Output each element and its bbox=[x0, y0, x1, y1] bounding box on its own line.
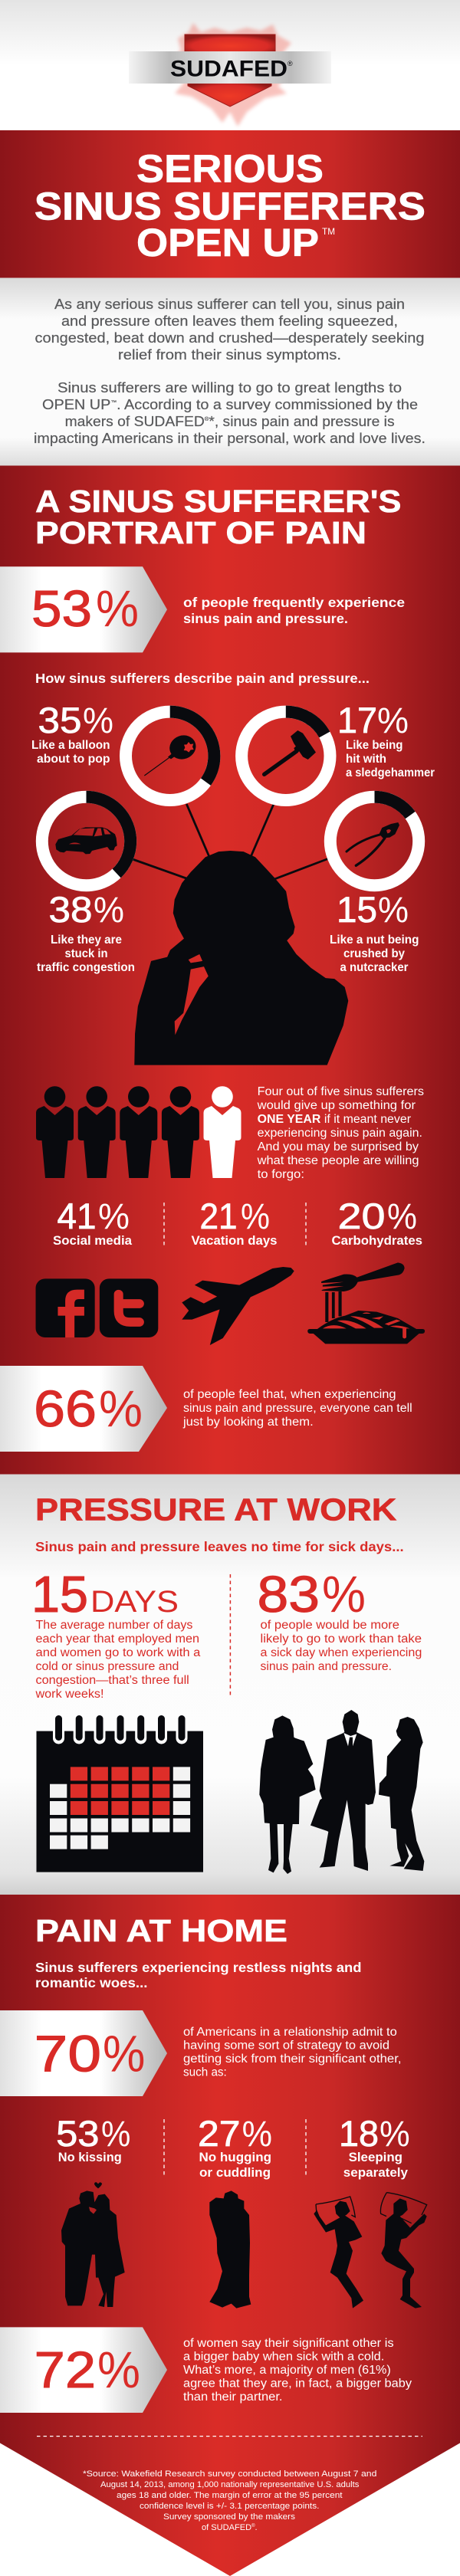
stat: 27% no hugging: or cuddling bbox=[199, 2165, 271, 2180]
callout: 70%: getting sick from their significant other, bbox=[183, 2053, 402, 2066]
callout: 70%: % bbox=[103, 2025, 145, 2083]
stat: 17% sledgehammer: 17 bbox=[337, 701, 377, 741]
stat: 15% nutcracker: crushed by bbox=[343, 947, 405, 960]
text block: intro: As any serious sinus sufferer can tell you, sinus pain bbox=[54, 297, 405, 312]
stat: 41% social media bbox=[53, 1196, 133, 1248]
stat: 83%: sinus pain and pressure. bbox=[261, 1660, 392, 1673]
stat: 18% sleeping separately: Sleeping bbox=[349, 2150, 402, 2164]
callout: 72% bbox=[0, 2327, 412, 2413]
heading: pain at home: PAIN AT HOME bbox=[35, 1913, 288, 1948]
callout: 70%: such as: bbox=[183, 2066, 227, 2079]
heading: a sinus sufferer's portrait of pain bbox=[35, 484, 402, 550]
panel: intro background bbox=[0, 277, 460, 466]
icon: business people bbox=[259, 1710, 424, 1874]
stat: 15 days: work weeks! bbox=[34, 1688, 104, 1701]
callout: 53%: sinus pain and pressure. bbox=[183, 611, 348, 626]
text block: source footnote: . bbox=[255, 2523, 258, 2532]
logo: Sudafed shield bbox=[129, 23, 331, 126]
callout: 66% bbox=[0, 1366, 412, 1452]
stat: 17% sledgehammer: Like being bbox=[346, 739, 403, 752]
stat: 27% no hugging: % bbox=[242, 2114, 272, 2154]
title: SERIOUS bbox=[136, 147, 324, 190]
callout: 53%: of people frequently experience bbox=[183, 595, 405, 610]
text block: intro: ® bbox=[205, 416, 209, 422]
stat: 41% social media: Social media bbox=[53, 1233, 133, 1248]
subheading: how sufferers describe pain: How sinus sufferers describe pain and pressure... bbox=[35, 671, 370, 686]
text block: intro: and pressure often leaves them feeling squeezed, bbox=[61, 313, 398, 329]
callout: 70%: of Americans in a relationship admit to bbox=[183, 2026, 397, 2039]
stat: 15 days: DAYS bbox=[90, 1585, 179, 1619]
stat: 18% sleeping separately: % bbox=[380, 2114, 410, 2154]
stat: 15 days bbox=[31, 1566, 201, 1701]
callout: 66%: sinus pain and pressure, everyone can tell bbox=[183, 1402, 412, 1415]
icon: balloon bbox=[144, 732, 199, 776]
text block: intro: . According to a survey commissioned by the bbox=[117, 397, 418, 412]
callout: 66%: % bbox=[99, 1380, 143, 1438]
callout: 72%: of women say their significant other is bbox=[183, 2337, 394, 2350]
text block: four out of five: what these people are willing bbox=[257, 1154, 419, 1167]
stat: 41% social media: 41 bbox=[57, 1196, 97, 1237]
callout: 72%: agree that they are, in fact, a bigger baby bbox=[183, 2377, 412, 2390]
stat: 15% nutcracker: 15 bbox=[337, 890, 377, 930]
stat: 53% no kissing: 53 bbox=[56, 2114, 100, 2154]
title: OPEN UP bbox=[136, 221, 319, 264]
callout: 70% bbox=[0, 2010, 402, 2096]
title: TM bbox=[322, 228, 335, 237]
stat: 15 days: 15 bbox=[31, 1566, 88, 1623]
stat: 83%: of people would be more bbox=[261, 1619, 399, 1632]
text block: intro: relief from their sinus symptoms. bbox=[118, 347, 341, 363]
callout: 53%: 53 bbox=[31, 580, 92, 638]
stat: 15% nutcracker: a nutcracker bbox=[340, 961, 408, 974]
stat: 17% sledgehammer: % bbox=[377, 701, 409, 741]
icon: kissing couple bbox=[61, 2182, 125, 2307]
text block: source footnote bbox=[83, 2469, 376, 2532]
stat: 38% traffic: 38 bbox=[49, 890, 92, 930]
stat: 27% no hugging bbox=[198, 2114, 272, 2180]
panel: title banner bbox=[0, 130, 460, 277]
callout: 70%: 70 bbox=[34, 2025, 101, 2083]
callout: 72%: What’s more, a majority of men (61%) bbox=[183, 2364, 391, 2377]
stat: 17% sledgehammer: hit with bbox=[346, 753, 386, 766]
stat: 21% vacation days: % bbox=[241, 1196, 270, 1237]
icon: car bbox=[55, 827, 117, 854]
stat: 17% sledgehammer: a sledgehammer bbox=[346, 766, 435, 779]
stat: 38% traffic bbox=[37, 797, 135, 974]
stat: 83%: 83 bbox=[258, 1566, 320, 1623]
stat: 27% no hugging: No hugging bbox=[199, 2150, 271, 2164]
stat: 15 days: and women go to work with a bbox=[35, 1646, 201, 1659]
text block: intro: *, sinus pain and pressure is bbox=[209, 414, 395, 429]
text block: intro bbox=[34, 297, 426, 446]
stat: 35% balloon bbox=[31, 701, 214, 800]
icon: hammer bbox=[264, 730, 316, 774]
stat: 15% nutcracker: Like a nut being bbox=[330, 934, 419, 947]
subheading: restless nights bbox=[35, 1960, 362, 1990]
stat: 53% no kissing: No kissing bbox=[58, 2150, 122, 2164]
icon: airplane bbox=[182, 1267, 294, 1345]
text block: source footnote: of SUDAFED bbox=[202, 2523, 251, 2532]
text block: intro: impacting Americans in their personal, work and love lives. bbox=[34, 431, 426, 446]
stat: 83%: likely to go to work than take bbox=[261, 1633, 422, 1646]
text block: four out of five: ONE YEAR if it meant never bbox=[258, 1113, 411, 1126]
stat: 17% sledgehammer bbox=[242, 701, 435, 800]
stat: 35% balloon: % bbox=[83, 701, 113, 741]
text block: four out of five: Four out of five sinus sufferers bbox=[258, 1085, 424, 1098]
logo: Sudafed shield: SUDAFED bbox=[170, 57, 288, 81]
heading: pressure at work: PRESSURE AT WORK bbox=[35, 1492, 397, 1528]
stat: 15 days: The average number of days bbox=[35, 1619, 193, 1632]
stat: 21% vacation days bbox=[192, 1196, 278, 1248]
callout: 72%: 72 bbox=[34, 2341, 96, 2399]
stat: 15 days: each year that employed men bbox=[35, 1633, 199, 1646]
stat: 20% carbohydrates: 20 bbox=[337, 1196, 385, 1237]
icon: nutcracker bbox=[347, 822, 399, 865]
stat: 20% carbohydrates: % bbox=[387, 1196, 417, 1237]
stat: 18% sleeping separately: 18 bbox=[339, 2114, 379, 2154]
callout: 66%: 66 bbox=[34, 1380, 97, 1438]
panel: pressure at work background bbox=[0, 1475, 460, 1895]
stat: 38% traffic: traffic congestion bbox=[37, 961, 135, 974]
text block: four out of five: experiencing sinus pain again. bbox=[258, 1127, 422, 1140]
callout: 72%: a bigger baby when sick with a cold. bbox=[183, 2350, 384, 2364]
heading: a sinus sufferer's portrait of pain: A SINUS SUFFERER'S bbox=[35, 484, 402, 519]
panel: header background bbox=[0, 0, 460, 130]
icon: calendar bbox=[37, 1715, 203, 1872]
stat: 35% balloon: 35 bbox=[38, 701, 81, 741]
panel: pain at home background bbox=[0, 1895, 460, 2576]
text block: intro: congested, beat down and crushed—desperately seeking bbox=[35, 330, 425, 346]
text block: four out of five bbox=[257, 1085, 424, 1181]
stat: 15 days: cold or sinus pressure and bbox=[35, 1660, 179, 1673]
text block: four out of five: to forgo: bbox=[258, 1168, 304, 1181]
icon: five people bbox=[36, 1086, 241, 1178]
callout: 72%: % bbox=[97, 2341, 140, 2399]
text block: intro: ™ bbox=[110, 400, 117, 405]
icon: pasta and fork bbox=[307, 1262, 425, 1344]
callout: 53% bbox=[0, 566, 405, 652]
subheading: restless nights: Sinus sufferers experiencing restless nights and bbox=[35, 1960, 362, 1975]
callout: 66%: of people feel that, when experiencing bbox=[183, 1388, 396, 1401]
icon: hugging couple bbox=[209, 2190, 251, 2309]
icon: social media logos bbox=[36, 1278, 158, 1337]
text block: intro: makers of SUDAFED bbox=[65, 414, 196, 429]
stat: 38% traffic: Like they are bbox=[51, 934, 122, 947]
text block: four out of five: would give up something for bbox=[257, 1099, 416, 1112]
text block: source footnote: August 14, 2013, among 1,000 nationally representative U.S. adults bbox=[100, 2480, 360, 2489]
subheading: no time for sick days: Sinus pain and pressure leaves no time for sick days... bbox=[35, 1539, 404, 1554]
stat: 83%: a sick day when experiencing bbox=[261, 1646, 422, 1659]
icon: head silhouette bbox=[134, 851, 348, 1065]
text block: intro: OPEN UP bbox=[42, 397, 104, 412]
text block: intro: Sinus sufferers are willing to go to great lengths to bbox=[58, 380, 402, 395]
panel: portrait of pain background bbox=[0, 466, 460, 1475]
stat: 83%: % bbox=[322, 1566, 366, 1623]
heading: a sinus sufferer's portrait of pain: PORTRAIT OF PAIN bbox=[35, 515, 366, 550]
icon: sleeping man with pillow bbox=[380, 2193, 427, 2309]
text block: source footnote: ages 18 and older. The margin of error at the 95 percent bbox=[117, 2491, 343, 2500]
subheading: restless nights: romantic woes... bbox=[35, 1975, 147, 1990]
stat: 18% sleeping separately bbox=[339, 2114, 410, 2180]
text block: source footnote: confidence level is +/- 3.1 percentage points. bbox=[140, 2502, 319, 2511]
stat: 20% carbohydrates bbox=[331, 1196, 422, 1248]
callout: 53%: % bbox=[96, 580, 139, 638]
stat: 21% vacation days: 21 bbox=[199, 1196, 238, 1237]
stat: 53% no kissing bbox=[56, 2114, 130, 2164]
text block: source footnote: Survey sponsored by the makers bbox=[163, 2512, 296, 2522]
connector lines bbox=[130, 804, 329, 879]
text block: four out of five: And you may be surprised by bbox=[258, 1140, 419, 1153]
stat: 15% nutcracker bbox=[330, 797, 419, 974]
icon: sleeping woman with pillow bbox=[314, 2197, 363, 2309]
stat: 38% traffic: % bbox=[94, 890, 124, 930]
title bbox=[34, 147, 426, 264]
text block: source footnote: *Source: Wakefield Research survey conducted between August 7 and bbox=[83, 2469, 376, 2479]
stat: 15% nutcracker: % bbox=[378, 890, 409, 930]
logo: Sudafed shield: ® bbox=[288, 60, 293, 67]
stat: 21% vacation days: Vacation days bbox=[192, 1233, 278, 1248]
stat: 38% traffic: stuck in bbox=[64, 947, 107, 960]
title: SINUS SUFFERERS bbox=[34, 184, 426, 228]
stat: 53% no kissing: % bbox=[101, 2114, 130, 2154]
stat: 35% balloon: about to pop bbox=[37, 753, 110, 766]
stat: 20% carbohydrates: Carbohydrates bbox=[331, 1233, 422, 1248]
stat: 18% sleeping separately: separately bbox=[343, 2165, 409, 2180]
callout: 70%: having some sort of strategy to avoid bbox=[183, 2039, 389, 2053]
callout: 72%: than their partner. bbox=[183, 2391, 282, 2404]
stat: 15 days: congestion—that’s three full bbox=[35, 1674, 189, 1687]
text block: source footnote: ® bbox=[251, 2523, 255, 2528]
stat: 41% social media: % bbox=[98, 1196, 130, 1237]
stat: 83% bbox=[258, 1566, 422, 1673]
callout: 66%: just by looking at them. bbox=[182, 1416, 314, 1429]
stat: 27% no hugging: 27 bbox=[198, 2114, 241, 2154]
stat: 35% balloon: Like a balloon bbox=[31, 739, 110, 752]
